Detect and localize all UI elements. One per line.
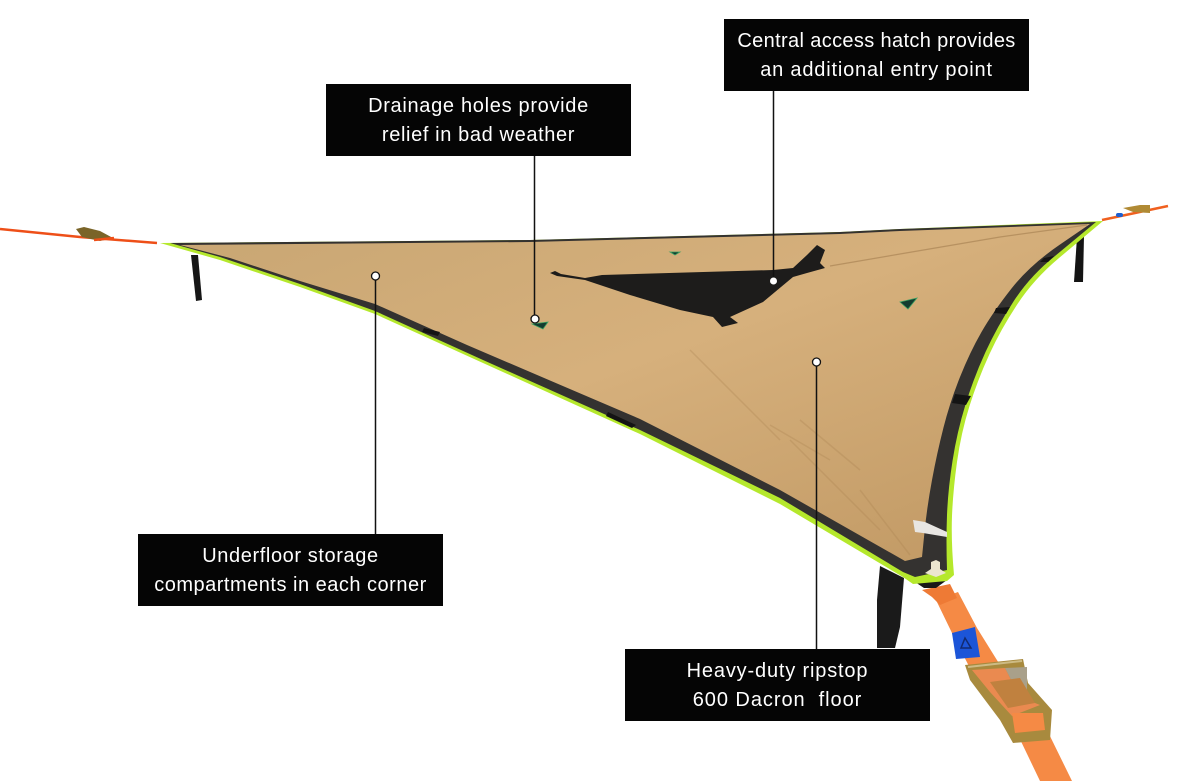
callout: underfloor storage: compartments in each corner xyxy=(154,574,427,596)
drainage vents xyxy=(532,252,917,329)
access hatch xyxy=(550,245,825,327)
callout: central access hatch: Central access hatch provides xyxy=(737,30,1016,52)
callout: drainage holes: Drainage holes provide xyxy=(368,95,589,117)
callout: underfloor storage: Underfloor storage xyxy=(202,545,379,567)
corner tag xyxy=(913,520,947,537)
leader: floor xyxy=(812,358,820,650)
leader: hatch xyxy=(770,90,777,284)
corner grommet xyxy=(925,560,946,577)
left strap and ratchet xyxy=(0,227,202,301)
callout: central access hatch: an additional entry point xyxy=(760,59,993,81)
callout: drainage holes: relief in bad weather xyxy=(382,124,575,146)
fabric creases xyxy=(830,225,1087,266)
bottom hanging loop xyxy=(877,566,904,648)
callout: ripstop floor: Heavy-duty ripstop xyxy=(687,660,868,682)
hammock floor xyxy=(160,221,1103,584)
leader: drainage xyxy=(531,156,539,323)
right strap and ratchet xyxy=(1074,205,1168,282)
callout: drainage holes xyxy=(326,84,631,156)
tan fabric xyxy=(180,224,1090,561)
binding tabs xyxy=(422,256,1054,428)
lime edge xyxy=(160,221,1103,584)
callout: ripstop floor: 600 Dacron floor xyxy=(693,689,862,711)
callout: underfloor storage xyxy=(138,534,443,606)
callout: ripstop floor xyxy=(625,649,930,721)
dark binding xyxy=(170,222,1096,577)
bottom orange strap and ratchet xyxy=(915,580,1072,781)
leader: storage xyxy=(372,272,380,534)
callout: central access hatch xyxy=(724,19,1029,91)
